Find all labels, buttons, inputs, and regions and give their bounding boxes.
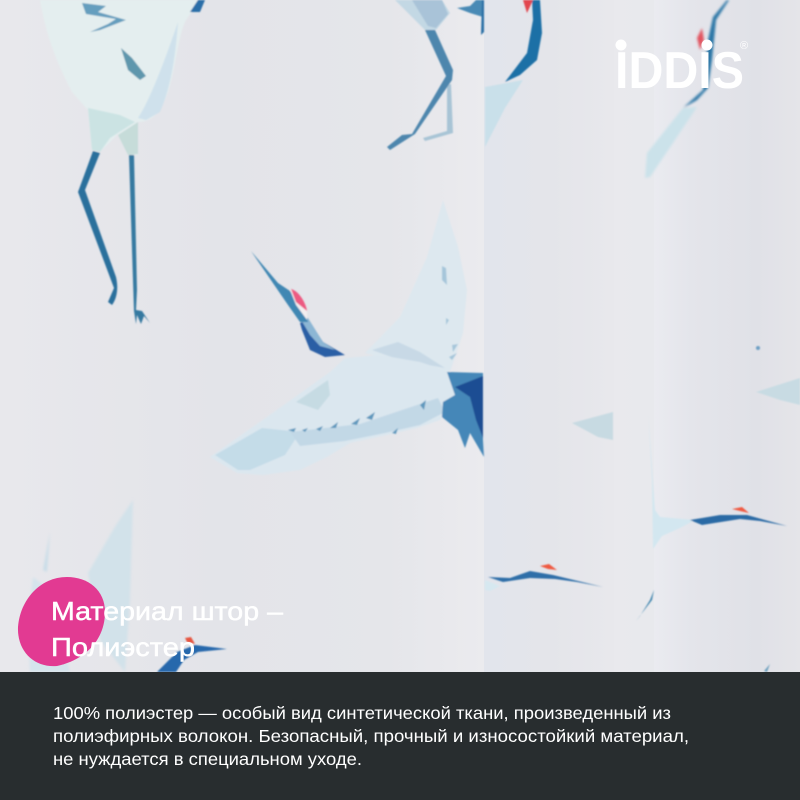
- lower wing and body: [210, 355, 460, 475]
- title: [51, 596, 284, 662]
- crane: wing fragment right edge: [756, 378, 800, 405]
- crane: small flying right: [636, 346, 787, 672]
- footer band: [0, 672, 800, 800]
- tail feathers: [442, 372, 484, 457]
- head and beak: [251, 251, 308, 322]
- description text: полиэфирных волокон. Безопасный, прочный и износостойкий материал,: [53, 726, 689, 746]
- crane: lower left wings: [28, 500, 133, 672]
- pink blob: [18, 577, 105, 666]
- description text: [53, 703, 689, 769]
- crane: lower neck and beak: [157, 637, 227, 672]
- title: Материал штор –: [51, 596, 284, 626]
- crane: small flying centre: [485, 564, 603, 591]
- crane: wing fragment centre right: [572, 412, 613, 440]
- description text: не нуждается в специальном уходе.: [53, 749, 362, 769]
- crane: neck top right of centre: [485, 0, 542, 147]
- neck: [300, 320, 345, 357]
- title: Полиэстер: [51, 632, 195, 662]
- crane: top right: [645, 0, 729, 178]
- crane: legs and body top left: [40, 0, 205, 324]
- description text: 100% полиэстер — особый вид синтетической ткани, произведенный из: [53, 703, 671, 723]
- crane: main flying: [210, 200, 484, 475]
- logo: ®: [740, 40, 748, 52]
- upper wing: [365, 200, 467, 372]
- crane: legs top centre: [387, 0, 484, 150]
- logo: IDDIS: [615, 42, 744, 100]
